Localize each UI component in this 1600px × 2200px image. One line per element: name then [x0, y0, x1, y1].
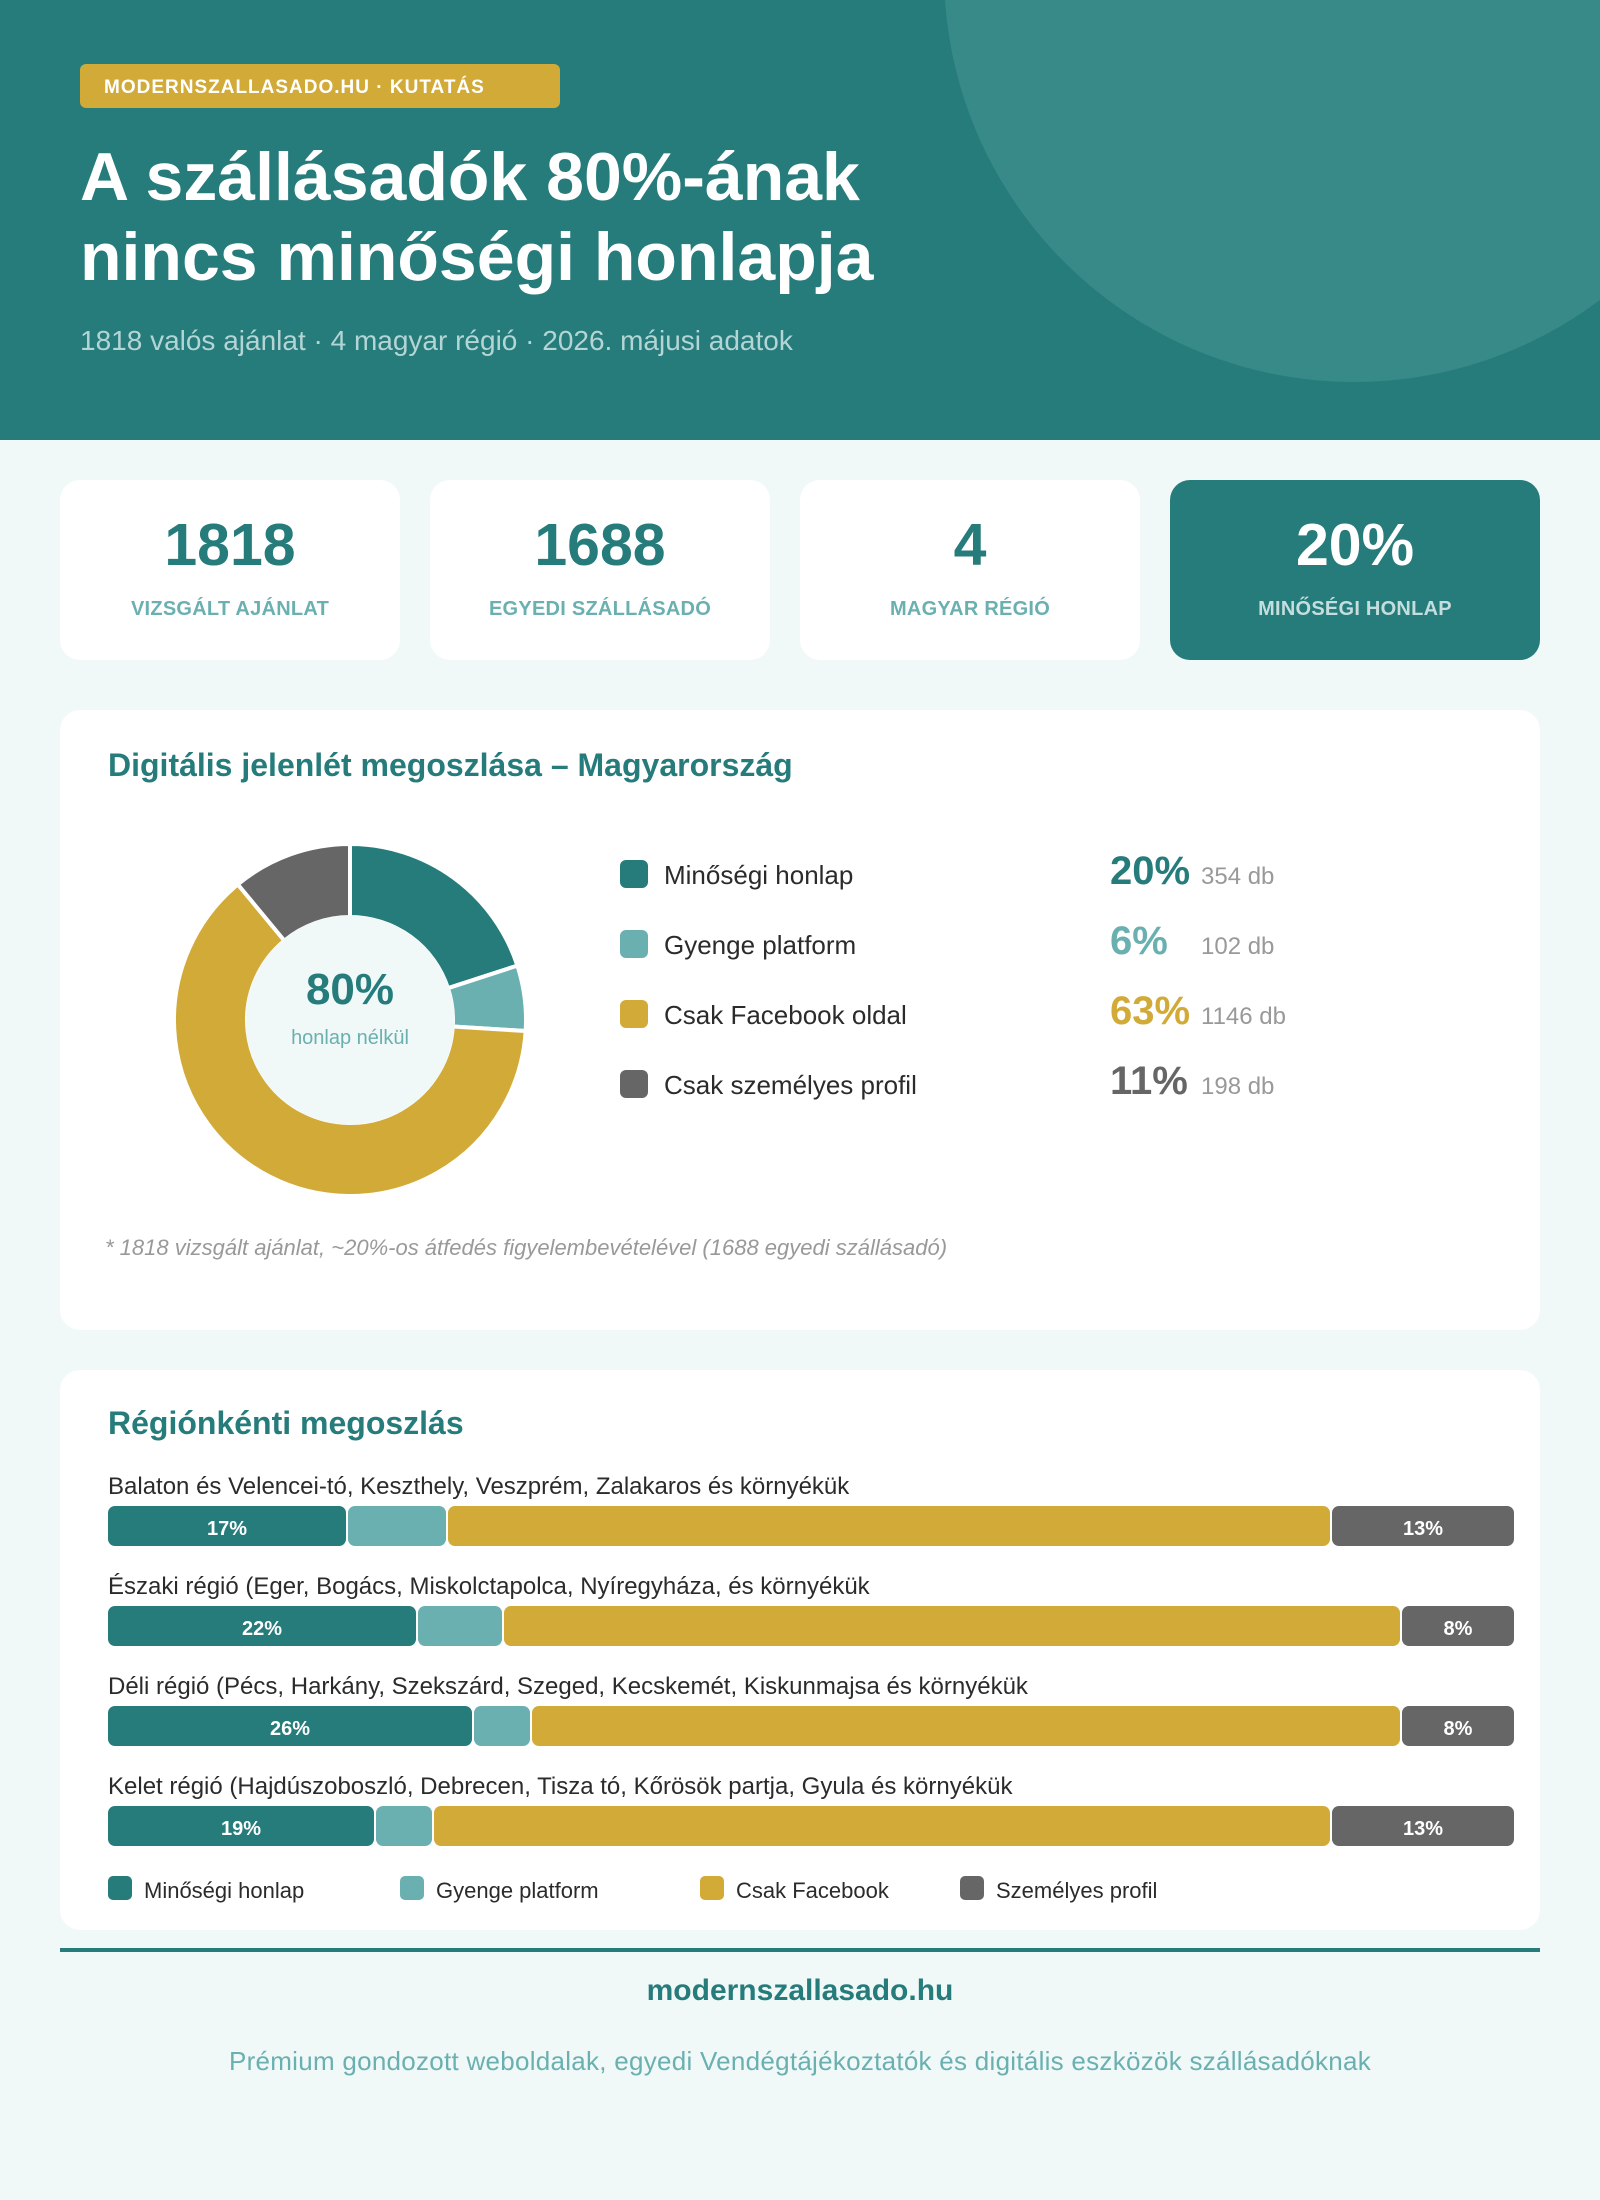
chart legend [108, 1876, 1157, 1903]
legend row: minőségi honlap: 20% [1110, 849, 1190, 893]
legend row: személyes profil [620, 1059, 1274, 1103]
stat card: minőségi honlap: 20% [1296, 512, 1414, 578]
legend row: minőségi honlap: 354 db [1201, 863, 1274, 890]
region bar: Balaton [108, 1473, 1514, 1546]
region bar: Kelet: Kelet régió (Hajdúszoboszló, Debrecen, Tisza tó, Kőrösök partja, Gyula és környékük [108, 1773, 1013, 1800]
region bar: Északi: Északi régió (Eger, Bogács, Miskolctapolca, Nyíregyháza, és környékük [108, 1573, 871, 1600]
stat card: vizsgált ajánlat [60, 480, 400, 660]
region bar: Balaton: 13% [1403, 1518, 1443, 1540]
legend row: gyenge platform: 102 db [1201, 933, 1274, 960]
stat card: magyar régió [800, 480, 1140, 660]
donut chart: honlap nélkül [291, 1027, 409, 1049]
region bar: Déli: Déli régió (Pécs, Harkány, Szekszárd, Szeged, Kecskemét, Kiskunmajsa és környékük [108, 1673, 1029, 1700]
stat card: egyedi szállásadó: 1688 [534, 512, 666, 578]
stat card: egyedi szállásadó: EGYEDI SZÁLLÁSADÓ [489, 596, 711, 620]
legend row: csak facebook [620, 989, 1286, 1033]
region bar: Északi [108, 1573, 1514, 1646]
footer [229, 1974, 1372, 2076]
chart legend: Gyenge platform [436, 1878, 599, 1903]
legend row: csak facebook: 1146 db [1201, 1003, 1286, 1030]
region bar: Kelet: 19% [221, 1818, 261, 1840]
legend row: minőségi honlap: Minőségi honlap [664, 860, 853, 890]
heading: Digitális jelenlét megoszlása – Magyarország [108, 747, 793, 783]
legend row: minőségi honlap [620, 849, 1274, 893]
panel: digital presence [60, 710, 1540, 1330]
title: A szállásadók 80%-ának [80, 139, 860, 215]
badge [80, 64, 560, 108]
legend row: csak facebook: 63% [1110, 989, 1190, 1033]
legend row: gyenge platform [620, 919, 1274, 963]
badge: MODERNSZALLASADO.HU · KUTATÁS [104, 76, 485, 98]
region bar: Kelet: 13% [1403, 1818, 1443, 1840]
region bar: Déli: 26% [270, 1718, 310, 1740]
donut chart [174, 844, 526, 1196]
region bar: Balaton: Balaton és Velencei-tó, Keszthely, Veszprém, Zalakaros és környékük [108, 1473, 850, 1500]
legend row: személyes profil: 198 db [1201, 1073, 1274, 1100]
legend row: csak facebook: Csak Facebook oldal [664, 1000, 907, 1030]
panel: regional breakdown [60, 1370, 1540, 1930]
legend row: személyes profil: Csak személyes profil [664, 1070, 917, 1100]
chart legend: Minőségi honlap [144, 1878, 304, 1903]
stat card: vizsgált ajánlat: VIZSGÁLT AJÁNLAT [131, 597, 329, 620]
footnote: * 1818 vizsgált ajánlat, ~20%-os átfedés figyelembevételével (1688 egyedi szállásadó) [105, 1235, 947, 1260]
footer: modernszallasado.hu [647, 1974, 953, 2007]
stat card: minőségi honlap: MINŐSÉGI HONLAP [1258, 597, 1452, 620]
heading: Régiónkénti megoszlás [108, 1405, 464, 1441]
region bar: Északi: 8% [1444, 1618, 1473, 1640]
stat card: minőségi honlap [1170, 480, 1540, 660]
decorative circle [945, 0, 1600, 382]
title: nincs minőségi honlapja [80, 219, 875, 295]
legend row: személyes profil: 11% [1110, 1059, 1188, 1103]
region bar: Balaton: 17% [207, 1518, 247, 1540]
legend row: gyenge platform: Gyenge platform [664, 930, 856, 960]
stat card: egyedi szállásadó [430, 480, 770, 660]
subtitle: 1818 valós ajánlat · 4 magyar régió · 2026. májusi adatok [80, 325, 794, 356]
header banner [0, 0, 1600, 440]
region bar: Kelet [108, 1773, 1514, 1846]
chart legend: Csak Facebook [736, 1878, 890, 1903]
region bar: Északi: 22% [242, 1618, 282, 1640]
chart legend: Személyes profil [996, 1878, 1157, 1903]
region bar: Déli [108, 1673, 1514, 1746]
footer: Prémium gondozott weboldalak, egyedi Vendégtájékoztatók és digitális eszközök szállásadóknak [229, 2046, 1372, 2076]
donut chart: 80% [306, 965, 394, 1014]
region bar: Déli: 8% [1444, 1718, 1473, 1740]
legend row: gyenge platform: 6% [1110, 919, 1168, 963]
stat card: vizsgált ajánlat: 1818 [164, 512, 296, 578]
stat card: magyar régió: 4 [954, 512, 987, 578]
stat card: magyar régió: MAGYAR RÉGIÓ [890, 596, 1050, 620]
